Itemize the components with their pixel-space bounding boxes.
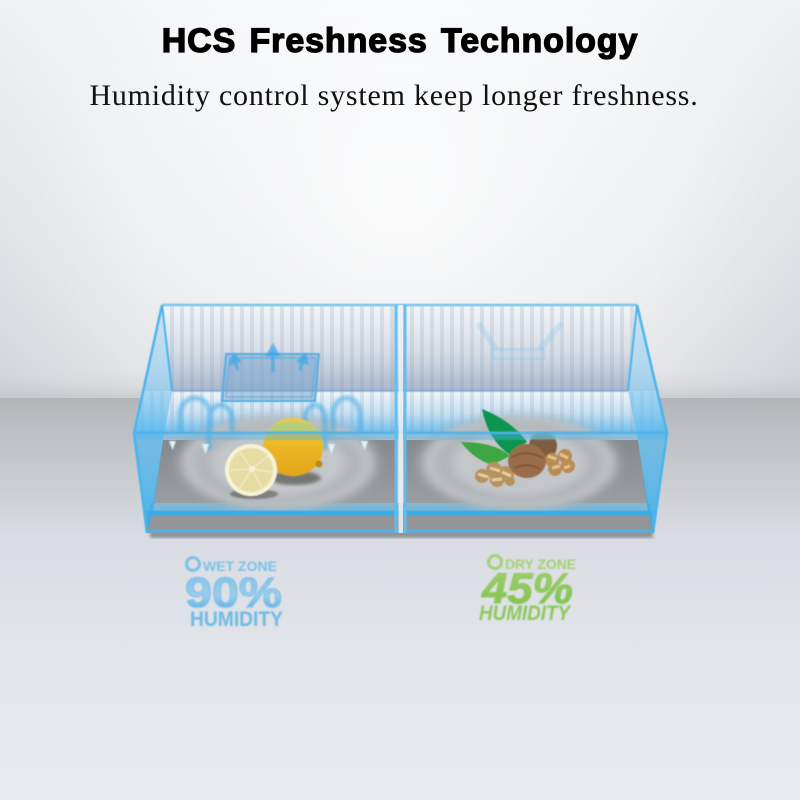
dry zone label: [479, 556, 576, 625]
walnut back: [529, 432, 557, 460]
dry zone vent: [478, 323, 562, 359]
ripple: dry zone: [411, 411, 627, 515]
lemons: [225, 418, 323, 499]
upper front wall band: [134, 391, 667, 433]
walnut kernel right: [545, 449, 575, 476]
floor: dry zone: [404, 440, 648, 503]
back wall: [162, 305, 637, 391]
floor: wet zone: [153, 440, 397, 503]
whole lemon: [263, 418, 323, 485]
dry zone label: HUMIDITY: [479, 602, 572, 625]
wet zone label: WET ZONE: [203, 558, 277, 574]
front frame and divider: [134, 305, 667, 533]
right side wall: [628, 305, 667, 533]
walnut kernel left: [475, 462, 515, 487]
left side wall: [134, 305, 172, 533]
lemon half: [225, 444, 278, 499]
wet zone droplets: [169, 441, 368, 454]
ripple: wet zone: [170, 411, 386, 515]
dry zone label: DRY ZONE: [505, 556, 576, 572]
subtitle: Humidity control system keep longer freshness.: [89, 79, 699, 112]
wet zone label: HUMIDITY: [190, 608, 283, 631]
leaves: [482, 409, 527, 455]
box shadow: [150, 530, 653, 538]
lower band: [147, 512, 652, 533]
walnuts and leaves: [461, 409, 575, 487]
wet zone label: 90%: [185, 569, 282, 617]
dry zone label: 45%: [481, 565, 573, 613]
center gap: [398, 305, 403, 533]
title: HCS Freshness Technology: [162, 22, 638, 60]
wet zone label: [185, 558, 283, 631]
walnut center: [508, 444, 546, 478]
humidity box diagram: [134, 305, 667, 538]
wet zone humidity arrows: [180, 398, 360, 450]
wet zone vent: [222, 346, 319, 401]
